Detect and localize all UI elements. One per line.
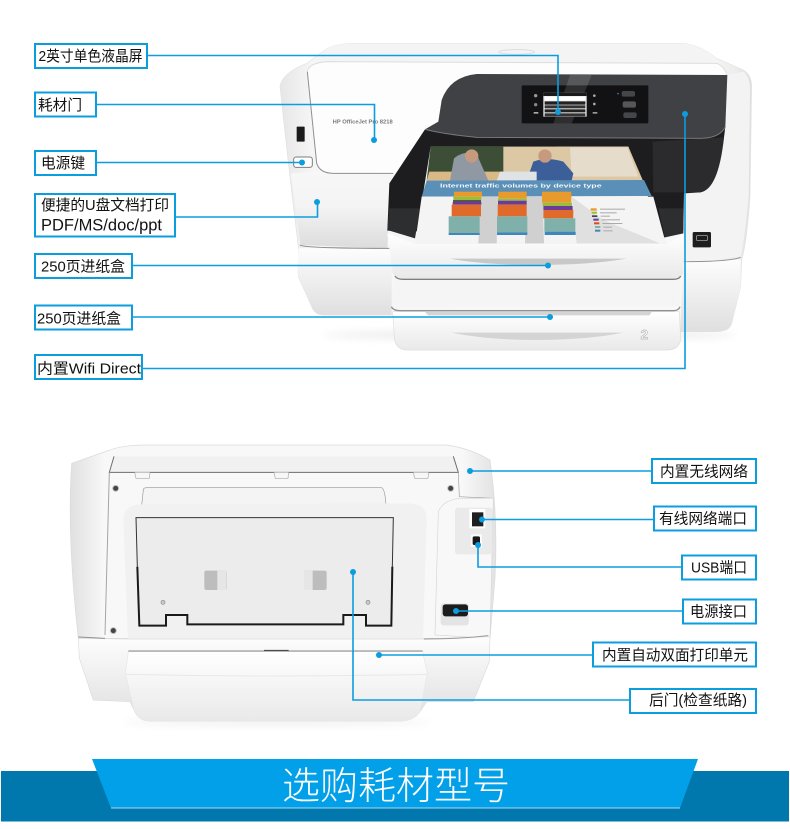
power button bbox=[294, 157, 312, 167]
rear printer photo bbox=[70, 445, 496, 725]
callout: USB端口 bbox=[475, 542, 756, 580]
callout: 后门(检查纸路) bbox=[350, 569, 756, 713]
printer shadow bbox=[323, 330, 737, 340]
callout: 电源键 bbox=[35, 151, 305, 175]
USB port bbox=[297, 127, 305, 142]
front printer photo bbox=[280, 43, 752, 350]
duplexer housing bbox=[123, 503, 427, 650]
callout: 电源接口 bbox=[453, 600, 756, 624]
callout: 电源键: 电源键 bbox=[41, 155, 85, 172]
banner ribbon bbox=[92, 759, 698, 808]
callout: U盘文档打印: PDF/MS/doc/ppt bbox=[41, 216, 162, 234]
door clips bbox=[204, 571, 227, 590]
section banner bbox=[1, 759, 789, 822]
banner backing bbox=[1, 771, 789, 822]
control panel hood bbox=[425, 74, 727, 138]
power socket bbox=[441, 603, 469, 625]
callout: 内置自动双面打印单元: 内置自动双面打印单元 bbox=[602, 647, 748, 664]
output tray side bbox=[387, 208, 420, 238]
base left bbox=[297, 248, 392, 315]
paper tray 1 bbox=[387, 233, 683, 278]
callout: 有线网络端口 bbox=[479, 506, 756, 530]
base right bbox=[680, 259, 741, 332]
callout: 有线网络端口: 有线网络端口 bbox=[659, 510, 747, 528]
callout: 内置Wifi Direct: 内置Wifi Direct bbox=[37, 360, 141, 378]
stacked bar 3 bbox=[542, 192, 576, 235]
right side panel bbox=[683, 72, 750, 262]
callout: 耗材门: 耗材门 bbox=[38, 97, 82, 114]
stacked bar 2 bbox=[497, 192, 527, 235]
screws bbox=[110, 485, 484, 634]
port panel bbox=[435, 498, 493, 638]
stacked bar 1 bbox=[449, 192, 482, 235]
output recess bbox=[387, 127, 725, 237]
upper slot bbox=[142, 488, 386, 505]
control panel bbox=[522, 75, 648, 123]
callout: 内置自动双面打印单元 bbox=[376, 642, 756, 666]
callout: U盘文档打印: 便捷的U盘文档打印 bbox=[41, 196, 169, 214]
rear body bbox=[70, 445, 496, 638]
callout: 电源接口: 电源接口 bbox=[690, 604, 747, 620]
callout: 2英寸单色液晶屏 bbox=[35, 44, 561, 115]
callout: 250页进纸盒 下 bbox=[35, 306, 553, 330]
callout: 后门(检查纸路): 后门(检查纸路) bbox=[649, 692, 747, 709]
printed page bbox=[415, 147, 667, 244]
lid tabs bbox=[135, 472, 429, 478]
usb port bbox=[471, 534, 482, 547]
callout: 250页进纸盒 下: 250页进纸盒 bbox=[37, 310, 121, 328]
callout: 250页进纸盒 上 bbox=[35, 254, 551, 278]
banner title: 选购耗材型号 bbox=[282, 766, 510, 808]
callout: 内置无线网络 bbox=[467, 459, 756, 483]
NFC badge bbox=[693, 232, 711, 247]
rear shadow bbox=[123, 720, 430, 725]
chart legend bbox=[591, 208, 625, 232]
left side shade bbox=[291, 172, 392, 248]
printer body bbox=[280, 43, 752, 332]
rear base bbox=[78, 637, 490, 721]
upper top surface bbox=[307, 43, 726, 73]
door screws bbox=[161, 600, 165, 604]
callout: 2英寸单色液晶屏: 2英寸单色液晶屏 bbox=[38, 47, 142, 65]
callout: 250页进纸盒 上: 250页进纸盒 bbox=[41, 258, 125, 276]
rear door bbox=[136, 518, 393, 626]
supply door bbox=[307, 62, 727, 173]
callout: 内置无线网络: 内置无线网络 bbox=[660, 464, 748, 480]
callout: U盘文档打印 bbox=[35, 194, 320, 236]
ethernet port bbox=[469, 509, 485, 528]
page heading: Internet traffic volumes by device type bbox=[440, 183, 602, 189]
paper tray 2 bbox=[391, 281, 681, 307]
callout: USB端口: USB端口 bbox=[691, 560, 747, 576]
rear top lid bbox=[109, 456, 458, 472]
HP logo emboss bbox=[499, 50, 535, 54]
callout: 耗材门 bbox=[35, 92, 377, 143]
model name: HP OfficeJet Pro 8218 bbox=[333, 119, 393, 125]
callout: 内置Wifi Direct bbox=[35, 111, 688, 379]
tray number: 2 bbox=[641, 327, 648, 342]
